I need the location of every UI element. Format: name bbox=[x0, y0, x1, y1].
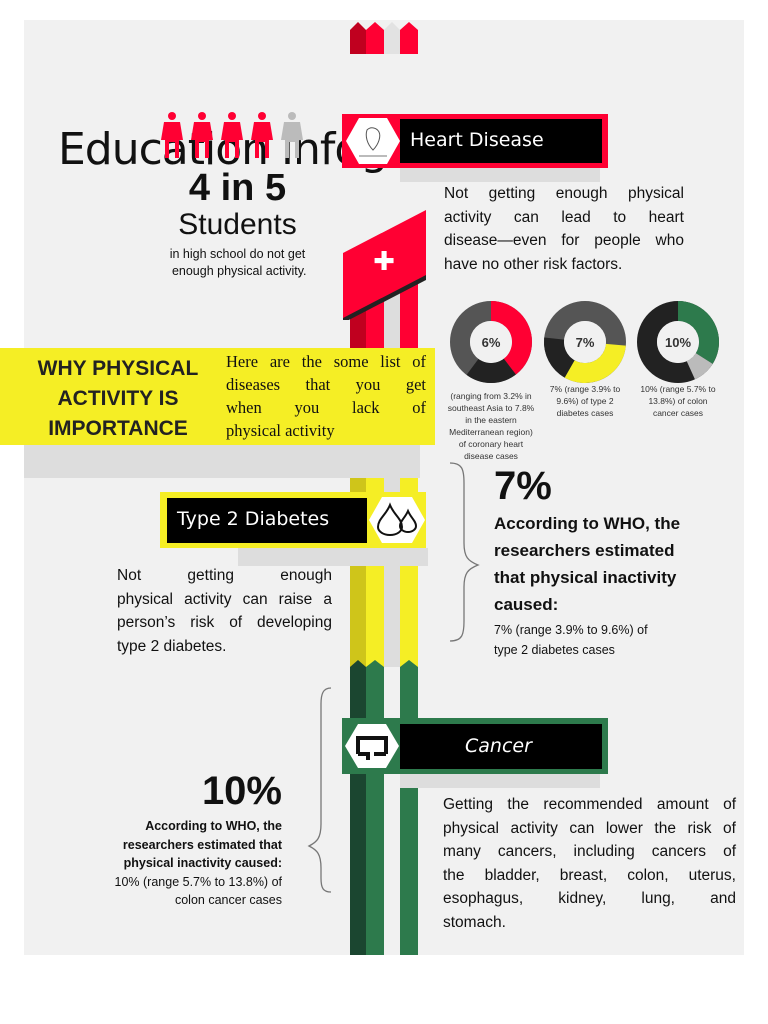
title: Education Infographic bbox=[58, 124, 519, 175]
stat 10%: According to WHO, the bbox=[145, 819, 282, 833]
stat 10% bbox=[115, 769, 282, 907]
why physical activity banner: physical activity bbox=[226, 421, 335, 440]
donut charts: in the eastern bbox=[465, 415, 517, 425]
stat: 4 in 5 students: in high school do not get bbox=[170, 247, 305, 261]
puzzle ribbon: ✚ bbox=[373, 247, 395, 277]
stat: 4 in 5 students bbox=[170, 167, 307, 278]
stat 7%: type 2 diabetes cases bbox=[494, 643, 615, 657]
heart text: Not getting enough physical bbox=[444, 185, 684, 202]
cancer text: Getting the recommended amount of bbox=[443, 796, 736, 813]
donut charts: 6% bbox=[482, 335, 501, 350]
diabetes text: type 2 diabetes. bbox=[117, 638, 226, 654]
stat 7%: 7% (range 3.9% to 9.6%) of bbox=[494, 623, 648, 637]
stat: 4 in 5 students: Students bbox=[178, 208, 297, 241]
cancer text: esophagus, kidney, lung, and bbox=[443, 890, 736, 907]
cancer text bbox=[443, 796, 736, 930]
why physical activity banner: WHY PHYSICAL ACTIVITY IS IMPORTANCE bbox=[38, 357, 198, 440]
donut charts: 7% bbox=[576, 335, 595, 350]
stat 10%: physical inactivity caused: bbox=[124, 856, 282, 870]
stat 7% bbox=[494, 464, 680, 657]
cancer text: physical activity can lower the risk of bbox=[443, 820, 736, 836]
brace left bbox=[308, 687, 331, 893]
stat 10%: researchers estimated that bbox=[123, 838, 282, 852]
diabetes text: person’s risk of developing bbox=[117, 614, 332, 631]
stat 10%: 10% bbox=[202, 769, 282, 813]
why physical activity banner: Here are the some list of bbox=[226, 352, 426, 371]
stat 10%: colon cancer cases bbox=[175, 893, 282, 907]
why physical activity banner bbox=[0, 348, 435, 478]
diabetes text: physical activity can raise a bbox=[117, 590, 332, 608]
stat 7%: researchers estimated bbox=[494, 541, 675, 560]
cancer text: the bladder, breast, colon, uterus, bbox=[443, 866, 736, 884]
cancer text: stomach. bbox=[443, 914, 506, 930]
heart text: disease—even for people who bbox=[444, 232, 684, 249]
heart text bbox=[444, 185, 684, 272]
cancer header bbox=[342, 718, 608, 788]
heart text: activity can lead to heart bbox=[444, 208, 684, 226]
icon: colon bbox=[345, 724, 399, 768]
icon: people 4 of 5 bbox=[161, 112, 303, 158]
donut charts: 10% (range 5.7% to bbox=[640, 384, 716, 394]
icon: heart hexagon bbox=[346, 118, 400, 164]
brace right bbox=[450, 462, 480, 642]
diabetes text: Not getting enough bbox=[117, 567, 332, 584]
stat 7%: that physical inactivity bbox=[494, 568, 676, 587]
heart disease header bbox=[342, 114, 608, 182]
stat 7%: According to WHO, the bbox=[494, 514, 680, 533]
stat: 4 in 5 students: enough physical activity. bbox=[172, 264, 307, 278]
puzzle ribbon bbox=[343, 210, 426, 320]
cancer text: many cancers, including cancers of bbox=[443, 843, 736, 860]
stat: 4 in 5 students: 4 in 5 bbox=[189, 167, 286, 209]
heart disease header: Heart Disease bbox=[410, 129, 544, 151]
why physical activity banner: diseases that you get bbox=[226, 375, 426, 394]
donut charts: 7% (range 3.9% to bbox=[550, 384, 620, 394]
stat 10%: 10% (range 5.7% to 13.8%) of bbox=[115, 874, 282, 888]
diabetes text bbox=[117, 567, 332, 654]
donut charts: (ranging from 3.2% in bbox=[450, 391, 532, 401]
donut charts bbox=[448, 301, 719, 460]
why physical activity banner: when you lack of bbox=[226, 398, 426, 417]
donut charts: 10% bbox=[665, 335, 691, 350]
donut charts: cancer cases bbox=[653, 408, 703, 418]
diabetes header bbox=[160, 492, 428, 566]
diabetes header: Type 2 Diabetes bbox=[177, 508, 329, 530]
heart text: have no other risk factors. bbox=[444, 256, 622, 272]
donut charts: Mediterranean region) bbox=[449, 427, 533, 437]
stat 7%: caused: bbox=[494, 595, 558, 614]
donut charts: southeast Asia to 7.8% bbox=[448, 403, 535, 413]
donut charts: 13.8%) of colon bbox=[648, 396, 708, 406]
donut charts: 9.6%) of type 2 bbox=[556, 396, 614, 406]
cancer header: Cancer bbox=[465, 735, 532, 757]
stat 7%: 7% bbox=[494, 464, 552, 508]
donut charts: of coronary heart bbox=[459, 439, 524, 449]
icon: drops bbox=[369, 497, 425, 543]
donut charts: diabetes cases bbox=[557, 408, 613, 418]
